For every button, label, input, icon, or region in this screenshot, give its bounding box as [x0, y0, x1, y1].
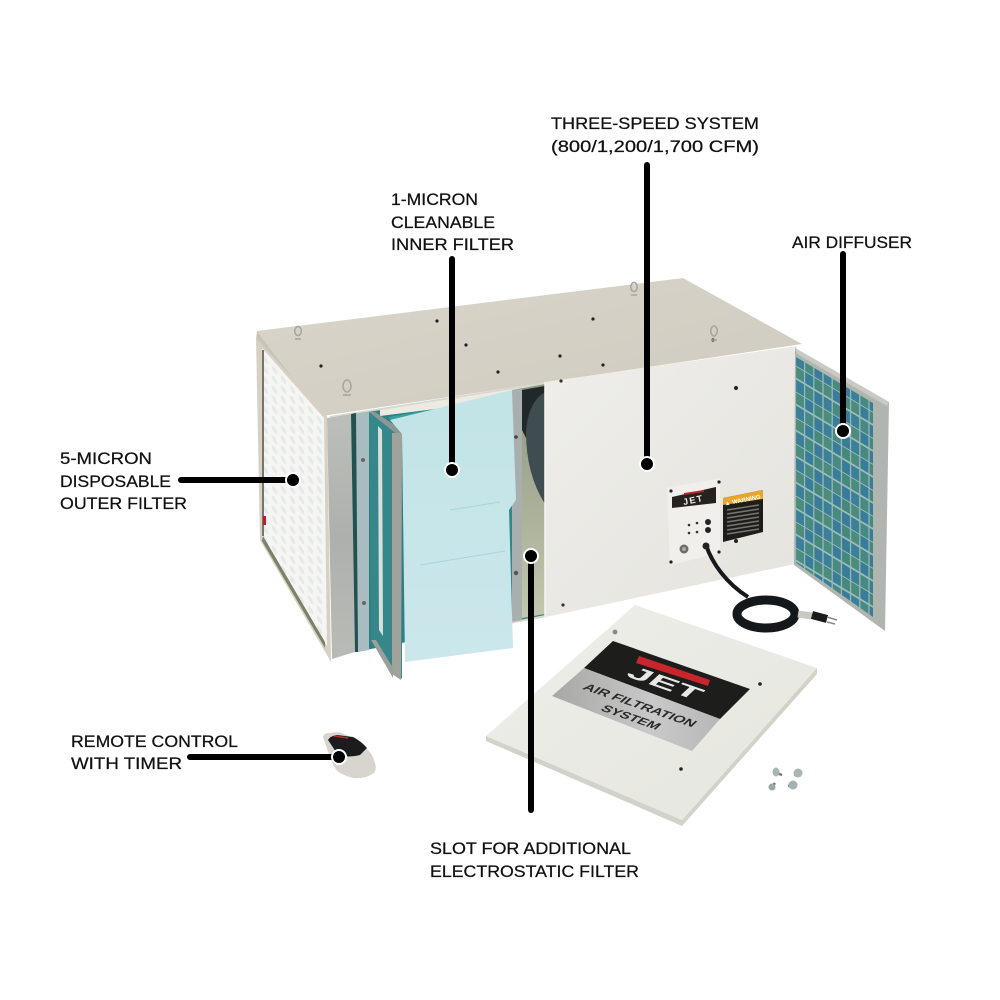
remote control	[323, 732, 376, 778]
heading text: three-speed: THREE-SPEED SYSTEM	[551, 114, 759, 133]
callout: three-speed system	[551, 114, 759, 471]
leader line	[644, 165, 650, 464]
power cord and plug	[702, 542, 837, 628]
leader line	[181, 477, 292, 483]
control plate	[667, 478, 721, 565]
callout: 1-micron filter	[391, 190, 514, 477]
top panel of unit	[256, 278, 802, 419]
1-micron inner filter bag	[388, 390, 516, 662]
swing-open filter door	[369, 412, 402, 680]
callout: remote control	[71, 732, 346, 773]
text: 1-micron: CLEANABLE	[391, 213, 495, 232]
callout: 5-micron filter	[60, 449, 300, 513]
warning label	[723, 490, 763, 542]
text: 1-micron: INNER FILTER	[391, 235, 514, 254]
callout: air diffuser	[792, 233, 912, 438]
galvanized frame strips	[327, 412, 369, 659]
control plate: JET	[682, 493, 705, 507]
leader line	[528, 556, 534, 810]
heading text: three-speed: (800/1,200/1,700 CFM)	[551, 137, 759, 156]
text: remote control: REMOTE CONTROL	[71, 732, 238, 751]
eye bolts	[295, 282, 717, 395]
JET badge: JET	[621, 663, 709, 704]
text: 5-micron: OUTER FILTER	[60, 494, 187, 513]
warning label: ▲ WARNING	[724, 495, 762, 507]
text: 5-micron: DISPOSABLE	[60, 472, 171, 491]
text: slot: SLOT FOR ADDITIONAL	[430, 839, 631, 858]
text: air diffuser: AIR DIFFUSER	[792, 233, 912, 252]
text: 5-micron: 5-MICRON	[60, 449, 152, 468]
JET badge: SYSTEM	[597, 703, 664, 732]
text: 1-micron: 1-MICRON	[391, 190, 478, 209]
air filtration unit	[256, 278, 889, 680]
JET badge	[552, 641, 750, 751]
callout: electrostatic filter slot	[430, 549, 639, 881]
front opening interior	[330, 382, 547, 652]
air diffuser filter	[794, 348, 889, 631]
leader line	[190, 754, 338, 760]
left side frame and 5-micron filter	[256, 338, 331, 662]
right front panel	[545, 346, 797, 617]
JET badge: AIR FILTRATION	[580, 681, 700, 729]
leader line	[449, 259, 455, 469]
text: remote control: WITH TIMER	[71, 754, 182, 773]
text: slot: ELECTROSTATIC FILTER	[430, 862, 639, 881]
leader line	[840, 254, 846, 430]
JET air filtration system cover panel	[486, 605, 817, 826]
thumb screws	[768, 768, 802, 790]
